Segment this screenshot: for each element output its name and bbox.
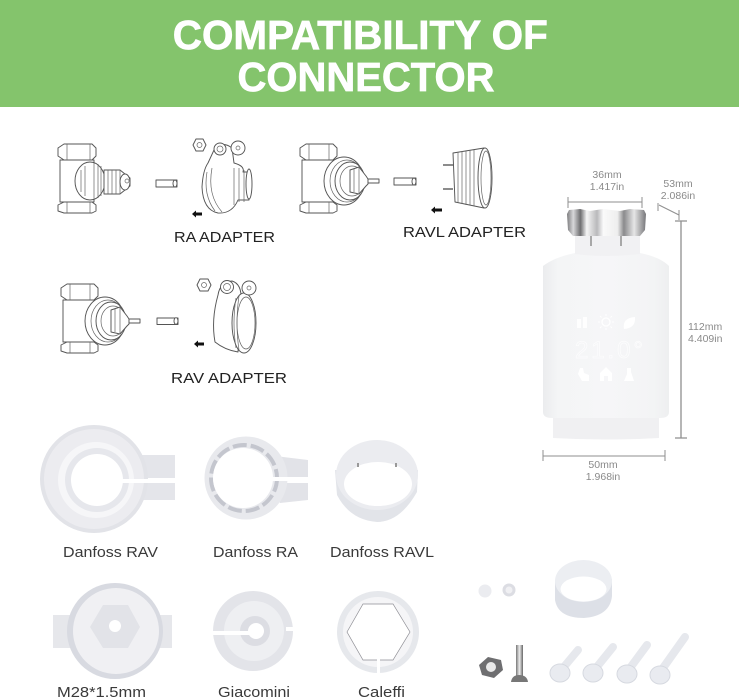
sleeve [157,318,178,324]
36mm dimension: 36mm [592,169,622,181]
sleeve [394,178,416,185]
Danfoss RAV connector [40,425,178,561]
arrow [194,340,204,348]
112mm dimension [675,221,723,438]
display icons [575,314,643,381]
plastic caps [478,584,516,598]
53mm dimension: 53mm [663,178,693,190]
50mm dimension: 1.968in [586,471,620,483]
signal icon [577,317,587,328]
Giacomini connector [213,591,296,700]
53mm dimension: 2.086in [661,190,695,202]
neck notches [591,236,621,246]
RAVL adapter diagram [300,144,526,241]
RAV label: RAV ADAPTER [171,371,287,387]
53mm dimension [658,178,695,220]
RAV adapter drawing [197,279,256,353]
thermostat product [543,209,669,440]
Danfoss RA connector [204,436,310,561]
arrow [431,206,442,214]
hex nut [479,657,503,678]
112mm dimension: 4.409in [688,333,723,345]
person icon [624,368,634,381]
pin heads [550,664,670,684]
RA adapter diagram [58,139,275,246]
neck [575,235,640,256]
header banner [0,0,739,107]
sleeve [156,180,177,187]
dimensions [543,169,723,483]
50mm dimension [543,450,665,483]
sun icon [598,314,614,330]
white ring [555,560,612,618]
RA label: RA ADAPTER [174,230,275,246]
hand icon [578,368,589,381]
valve for RAVL [300,144,379,213]
RAVL label: RAVL ADAPTER [403,225,526,241]
valve for RAV [61,284,140,353]
label: Danfoss RAV [63,544,158,561]
M28 connector [53,583,172,700]
112mm dimension: 112mm [688,321,722,333]
chrome cap [567,209,646,236]
Danfoss RAVL connector [330,440,434,561]
accessories [478,560,685,684]
main body [543,253,669,418]
base [553,416,659,440]
label: Danfoss RAVL [330,544,434,561]
36mm dimension [568,169,642,208]
36mm dimension: 1.417in [590,181,624,193]
Caleffi connector [337,591,419,700]
white pins [563,637,685,668]
home icon [600,367,612,381]
title: COMPATIBILITY OF [173,12,548,58]
label: Danfoss RA [213,544,298,561]
arrow [192,210,202,218]
RAVL adapter drawing [443,148,492,208]
title: CONNECTOR [238,54,494,100]
valve for RA [58,144,130,213]
50mm dimension: 50mm [588,459,618,471]
leaf icon [624,317,635,329]
temperature digits: 21.0° [575,337,643,364]
RA adapter drawing [193,139,252,213]
screw [511,645,528,682]
RAV adapter diagram [61,279,287,387]
